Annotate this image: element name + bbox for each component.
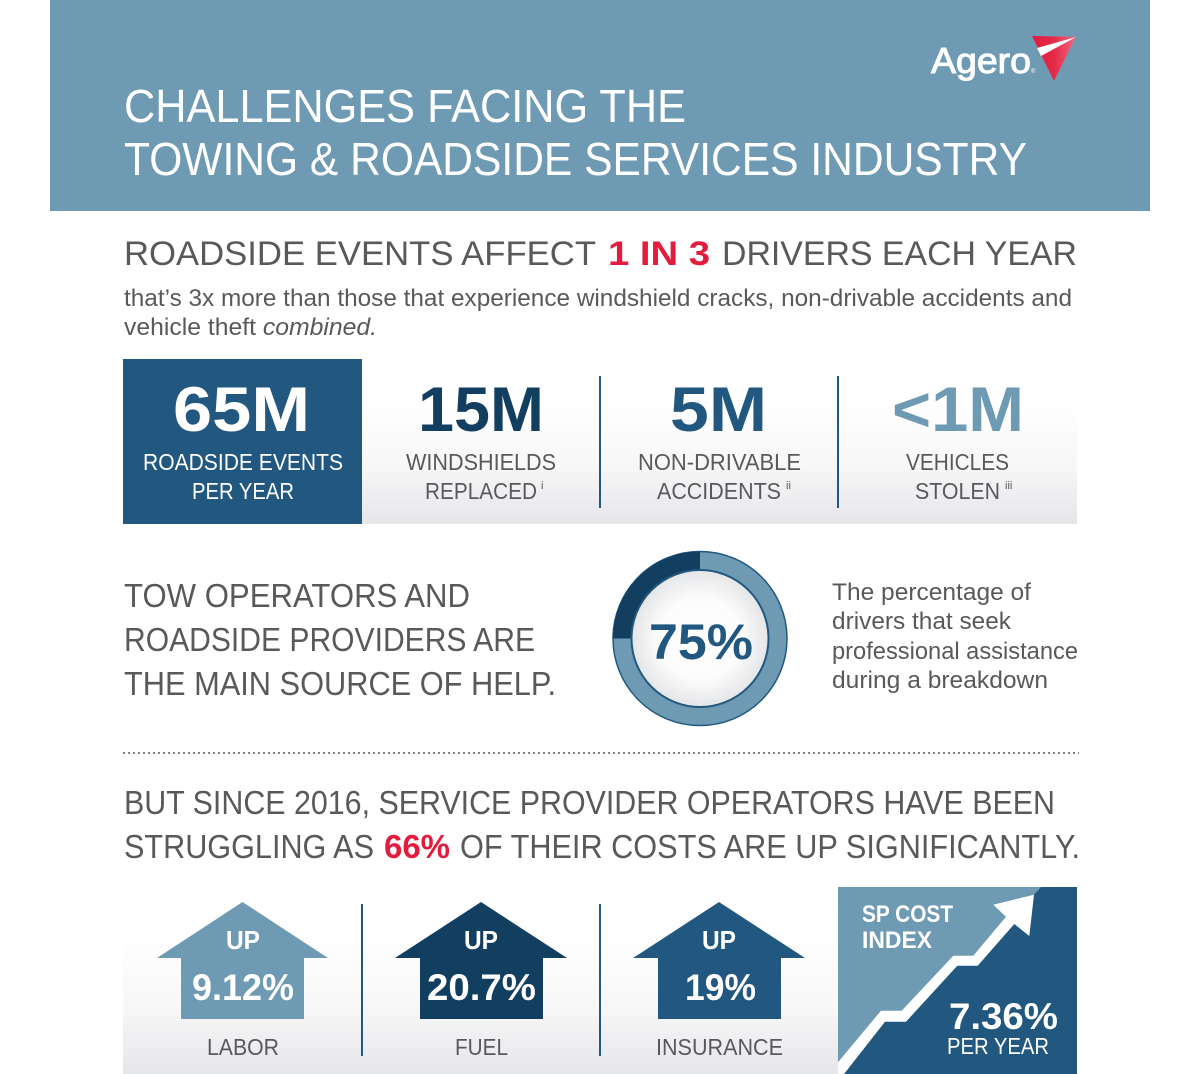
panel: SP cost index xyxy=(838,887,1077,1074)
heading: costs up: OF THEIR COSTS ARE UP SIGNIFICANTLY. xyxy=(460,828,1080,865)
heading: costs up: 66% xyxy=(384,828,450,865)
donut chart: 75% xyxy=(613,552,787,726)
logo: Agero xyxy=(931,36,1076,81)
arrow: insurance: UP xyxy=(702,925,736,955)
text block: percentage description: during a breakdown xyxy=(832,667,1048,694)
heading: costs up: BUT SINCE 2016, SERVICE PROVIDER OPERATORS HAVE BEEN xyxy=(124,784,1055,821)
text block: percentage description xyxy=(832,579,1078,694)
stat: 65M roadside events: 65M xyxy=(173,375,310,445)
arrow: fuel: UP xyxy=(464,925,498,955)
arrow: insurance: 19% xyxy=(685,967,756,1008)
text block: main source of help: ROADSIDE PROVIDERS ARE xyxy=(124,621,535,658)
title: CHALLENGES FACING THE xyxy=(124,80,686,132)
stat: 65M roadside events: PER YEAR xyxy=(192,478,294,504)
stat: 15M windshields: 15M xyxy=(418,375,544,445)
arrow: labor xyxy=(157,902,328,1060)
arrow: insurance xyxy=(633,902,805,1060)
stat: 15M windshields: REPLACED xyxy=(425,478,537,504)
text block: comparison note: vehicle theft combined. xyxy=(124,314,377,341)
heading: roadside events: ROADSIDE EVENTS AFFECT xyxy=(124,235,596,273)
stat: under 1M vehicles: VEHICLES xyxy=(906,449,1009,475)
logo: Agero: Agero xyxy=(931,40,1031,81)
text block: percentage description: professional assistance xyxy=(832,638,1078,665)
arrow: labor: 9.12% xyxy=(192,967,294,1008)
stat: 65M roadside events: ROADSIDE EVENTS xyxy=(143,449,343,475)
panel: event statistics xyxy=(123,359,1077,524)
heading: roadside events: DRIVERS EACH YEAR xyxy=(722,235,1077,273)
arrow: fuel: 20.7% xyxy=(427,967,536,1008)
arrow: fuel xyxy=(395,902,567,1060)
title xyxy=(124,80,1027,185)
text block: comparison note: that’s 3x more than those that experience windshield cracks, non-drivable accidents and xyxy=(124,285,1072,312)
stat: 65M roadside events xyxy=(123,359,362,524)
arrow: fuel: FUEL xyxy=(455,1034,508,1060)
panel: SP cost index: 7.36% xyxy=(949,996,1058,1037)
stat: under 1M vehicles: <1M xyxy=(892,375,1024,445)
text block: main source of help: TOW OPERATORS AND xyxy=(124,577,470,614)
panel: SP cost index: SP COST xyxy=(862,901,953,928)
heading: costs up xyxy=(124,784,1080,865)
text block: main source of help: THE MAIN SOURCE OF HELP. xyxy=(124,665,556,702)
arrow: rising trend xyxy=(838,895,1034,1074)
arrow: labor: LABOR xyxy=(207,1034,279,1060)
text block: percentage description: drivers that seek xyxy=(832,608,1012,635)
arrow: labor: UP xyxy=(226,925,260,955)
heading: roadside events xyxy=(124,235,1077,273)
stat: under 1M vehicles: STOLEN xyxy=(915,478,1000,504)
stat: 5M accidents xyxy=(638,375,801,504)
text block: percentage description: The percentage of xyxy=(832,579,1031,606)
text block: main source of help xyxy=(124,577,556,702)
panel: cost increases xyxy=(123,887,838,1074)
heading: roadside events: 1 IN 3 xyxy=(608,235,710,273)
stat: 5M accidents: NON-DRIVABLE xyxy=(638,449,801,475)
stat: 5M accidents: ii xyxy=(786,480,791,492)
donut chart: 75%: 75% xyxy=(649,614,753,670)
header banner xyxy=(50,0,1150,211)
stat: under 1M vehicles: iii xyxy=(1005,480,1012,492)
title: TOWING & ROADSIDE SERVICES INDUSTRY xyxy=(124,133,1027,185)
logo: Agero: ® xyxy=(1031,68,1036,75)
stat: 5M accidents: ACCIDENTS xyxy=(657,478,781,504)
panel: SP cost index: INDEX xyxy=(862,927,932,954)
stat: 15M windshields: i xyxy=(541,480,543,492)
stat: 15M windshields xyxy=(406,375,556,504)
stat: 5M accidents: 5M xyxy=(670,375,767,445)
stat: under 1M vehicles xyxy=(892,375,1024,504)
panel: SP cost index: PER YEAR xyxy=(947,1033,1049,1059)
stat: 15M windshields: WINDSHIELDS xyxy=(406,449,556,475)
heading: costs up: STRUGGLING AS xyxy=(124,828,374,865)
text block: comparison note xyxy=(124,285,1072,341)
arrow: insurance: INSURANCE xyxy=(656,1034,783,1060)
